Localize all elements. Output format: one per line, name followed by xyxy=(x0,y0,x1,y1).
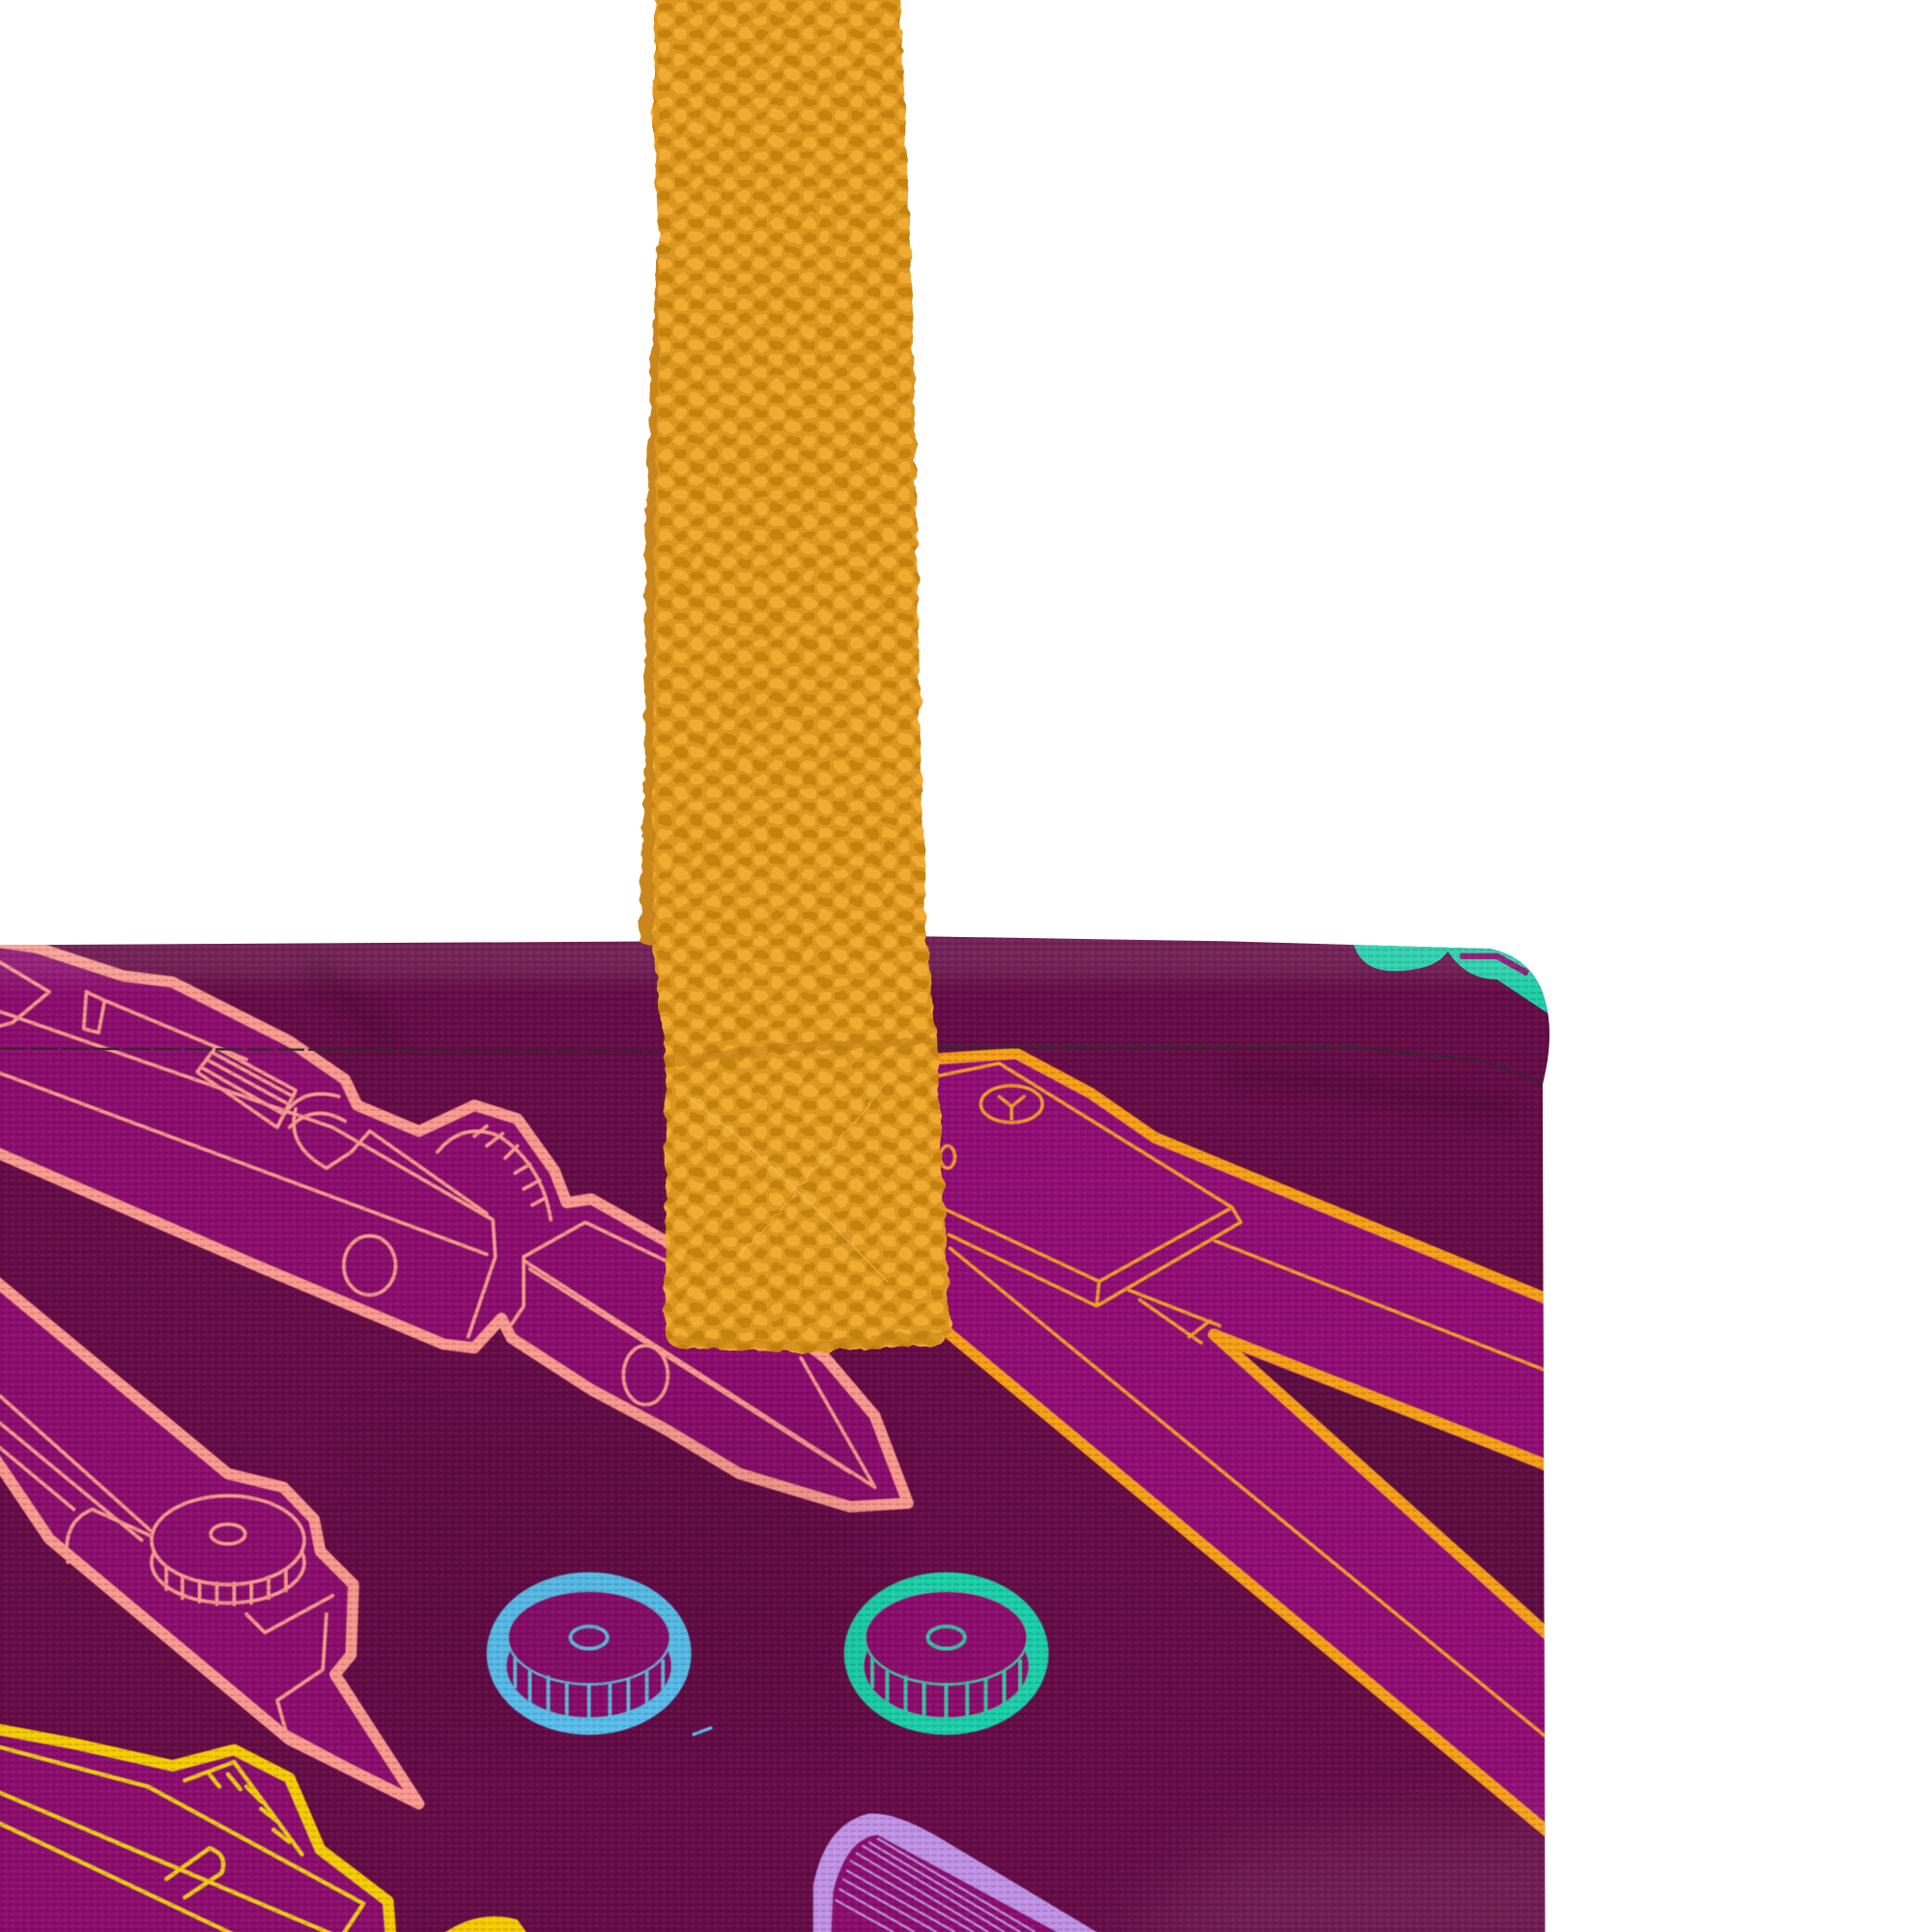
hem stitching xyxy=(0,1047,1545,1084)
printed wheel: blue xyxy=(487,1573,712,1735)
printed pen: purple xyxy=(813,1813,1122,1932)
printed compass: pink lower xyxy=(0,1264,419,1804)
strap fold shadow xyxy=(666,1037,938,1067)
strap back layer xyxy=(639,246,671,949)
printed compass: yellow xyxy=(0,1725,532,1932)
fabric shading and folds xyxy=(0,912,1602,1932)
strap cross stitch xyxy=(688,1084,887,1282)
printed shape: teal top right xyxy=(1353,945,1548,1013)
printed wheel: teal xyxy=(844,1573,1048,1735)
strap front xyxy=(653,0,950,1353)
tote bag body xyxy=(0,936,1549,1932)
printed compass: orange xyxy=(912,1054,1552,1836)
canvas weave texture xyxy=(0,924,1602,1932)
printed compass: pink upper xyxy=(0,939,908,1804)
strap bottom edge xyxy=(668,1331,948,1351)
orange strap xyxy=(639,0,950,1353)
